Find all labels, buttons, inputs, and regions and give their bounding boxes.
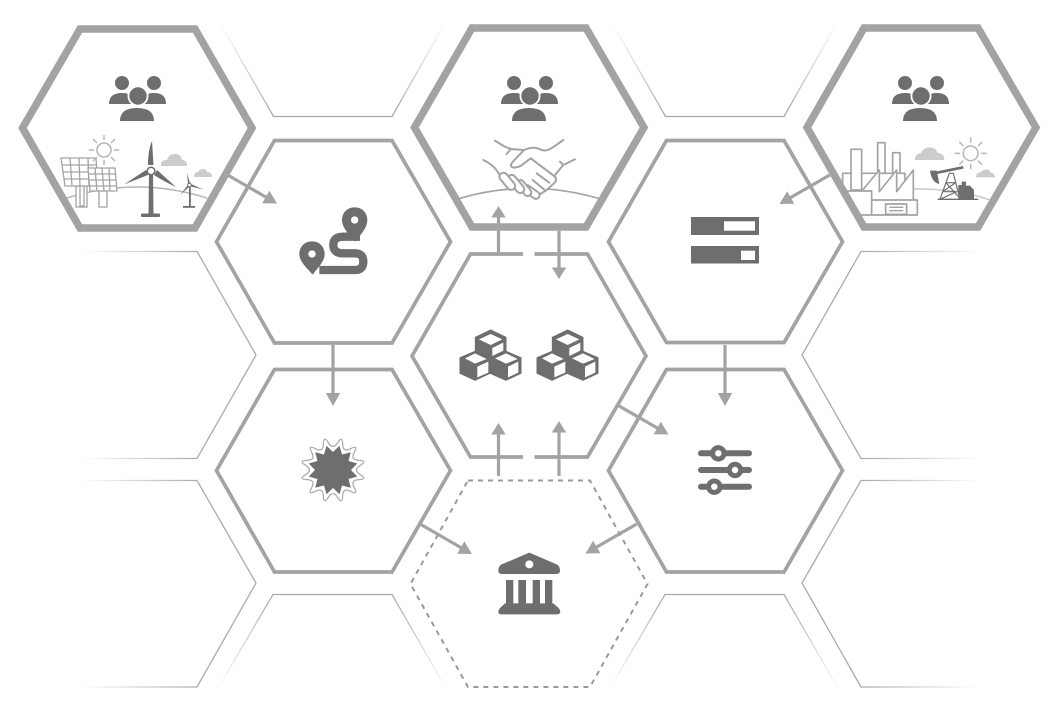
faded hexagon: bottom left [217, 594, 447, 690]
wind turbine small [180, 173, 203, 208]
arrow: cubes to sliders [615, 399, 672, 441]
faded hexagon: right lower [802, 480, 980, 687]
arrow: burst to bank [417, 518, 476, 560]
sun [89, 135, 119, 165]
icon: sliders [701, 448, 749, 492]
arrow: renewable to route [225, 169, 281, 210]
illustration: handshake [460, 140, 598, 200]
faded hexagon: right middle [802, 252, 980, 458]
icon: route with two location pins [299, 207, 367, 275]
arrow: bank up to cubes right [552, 421, 566, 476]
faded hexagon: left middle [80, 252, 256, 458]
arrow: handshake down to cubes [552, 231, 566, 279]
hexagon: route [216, 140, 450, 343]
icon: cubes right [537, 330, 598, 380]
hexagon: renewable stakeholders [22, 29, 252, 228]
icon: burst [302, 439, 364, 501]
hexagon: burst [216, 370, 450, 572]
fingers [498, 171, 541, 200]
clouds [161, 154, 187, 166]
pumpjack [940, 173, 960, 199]
hexagon: sliders [608, 370, 842, 572]
icon: cubes left [460, 330, 521, 380]
arrow: route to burst [326, 345, 340, 406]
arrow: industry to bars [776, 169, 833, 210]
faded hexagon: top between 1 and 2 [220, 23, 445, 116]
faded hexagon: bottom right [609, 594, 839, 690]
hexagon: handshake stakeholders [414, 28, 644, 227]
arrow: cubes up to handshake [491, 206, 506, 254]
arrow: sliders to bank [582, 518, 640, 560]
icon: progress bars [691, 217, 759, 264]
hexagon: industry stakeholders [807, 28, 1036, 227]
arrow: bars to sliders [718, 345, 732, 406]
hexagon: cubes with gaps [412, 254, 646, 457]
arrow: bank up to cubes left [491, 423, 506, 476]
icon: bank building [498, 553, 560, 614]
sun [955, 137, 987, 169]
faded hexagon: left lower [80, 480, 256, 687]
hexagon: dashed bank [410, 480, 648, 687]
icon: people group centre [501, 76, 558, 121]
illustration: solar panels and wind turbines [61, 135, 212, 217]
hexagon: bars [608, 140, 842, 342]
solar panel large [61, 158, 117, 207]
icon: people group right [892, 76, 949, 121]
icon: people group left [109, 76, 166, 121]
illustration: factory, pumpjack, sun and clouds [843, 137, 995, 215]
clouds [915, 147, 944, 160]
faded hexagon: top between 2 and 3 [612, 23, 837, 116]
wind turbine large [124, 141, 176, 217]
